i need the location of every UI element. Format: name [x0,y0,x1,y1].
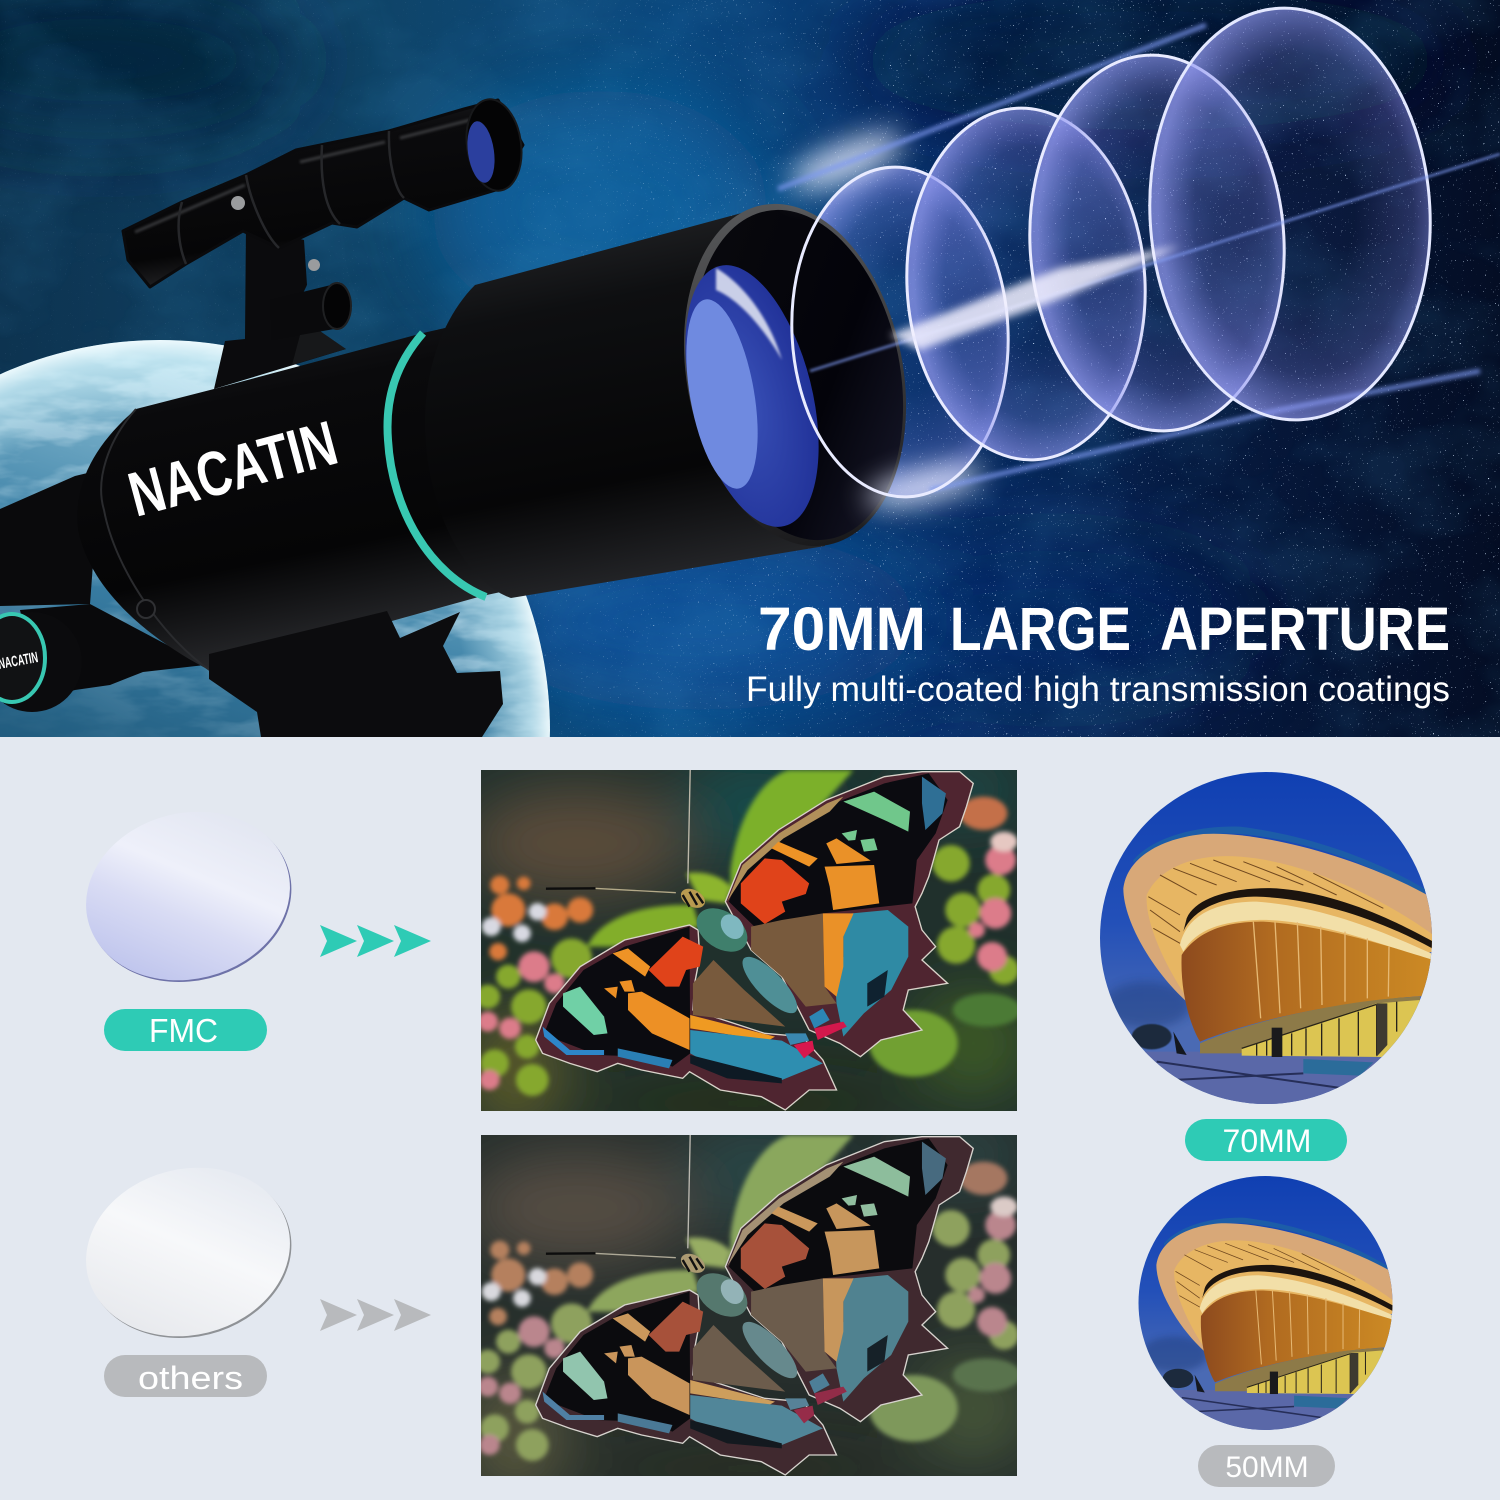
finder scope [123,96,527,389]
lower screw [308,259,320,271]
focuser knob [0,612,82,712]
main telescope tube [0,185,934,700]
ring 1 glass fill [820,168,1007,496]
knob back [0,612,82,712]
finder top highlight [135,120,470,232]
bottom glow [863,457,987,515]
label: FMC [104,1009,267,1051]
planet [0,340,550,737]
heading [758,595,1450,663]
planet clouds [0,340,560,737]
finder joints [179,131,404,264]
side knob end [323,283,351,329]
panel: space hero scene [0,0,1500,737]
lens rim shadow [69,1148,309,1359]
ring 4 [1139,1,1441,427]
others pill [104,1355,267,1397]
photo: vivid butterfly [464,750,1031,1137]
icon: FMC lens [68,790,309,1003]
photo: 50mm building view [1131,1171,1399,1438]
planet surface [0,340,550,737]
top glow [785,122,909,200]
heading word 2: LARGE [950,595,1131,663]
photo: 70mm building view [1090,765,1440,1115]
70MM pill [1185,1119,1347,1161]
lens face [68,1147,308,1357]
lens white glare [716,268,782,360]
label: 50MM [1198,1445,1335,1487]
body screw [137,600,155,618]
70MM text: 70MM [1223,1123,1311,1159]
heading word 3: APERTURE [1160,595,1450,663]
finder tube body [123,100,523,287]
aperture interior [666,192,930,558]
subheading: Fully multi-coated high transmission coatings [746,670,1450,709]
main body [77,320,510,671]
others text: others [138,1360,243,1396]
teal ring [387,333,486,597]
finder bracket [214,225,346,389]
ring 1 outline [784,162,1016,502]
side knob [290,285,334,335]
knob face [0,614,45,702]
central light beam [890,246,1180,350]
FMC text: FMC [149,1012,218,1049]
space background [0,0,1500,737]
planet rim [0,340,550,737]
icon: teal arrows [320,925,431,957]
heading word 1: 70MM [758,595,926,663]
finder front rim [466,98,523,192]
ring 2 [898,102,1154,466]
body ring seam [101,409,211,671]
FMC pill [104,1009,267,1051]
50MM text: 50MM [1225,1451,1309,1484]
nebula texture [0,0,1500,737]
stars [0,0,1500,737]
label: others [104,1355,267,1397]
finder objective lens [467,121,495,183]
lens beam rings [778,1,1500,515]
bracket wedge [292,332,346,365]
icon: gray arrows [320,1299,431,1331]
aperture outer rim [656,185,934,565]
ring 3 [1020,49,1294,437]
blue objective lens [661,251,843,541]
rear tube [0,470,100,606]
thin central beam [810,154,1500,371]
nebula glow [0,0,1248,728]
panel: other lens comparison [68,1146,431,1397]
brand logo: NACATIN [122,408,344,531]
50MM pill [1198,1445,1335,1487]
mount bracket [209,611,503,737]
adjustment screw [231,196,245,210]
rear focuser body [20,604,205,700]
dew shield [425,204,825,598]
icon: ordinary lens [68,1146,309,1359]
lens inner highlight [674,294,770,494]
panel: FMC lens comparison [68,790,431,1051]
photo: dull butterfly [464,1115,1031,1500]
lens face [68,791,308,1001]
lens rim shadow [69,792,309,1003]
label: 70MM [1185,1119,1347,1161]
top beam line [778,25,1206,189]
bottom beam line [930,371,1480,490]
